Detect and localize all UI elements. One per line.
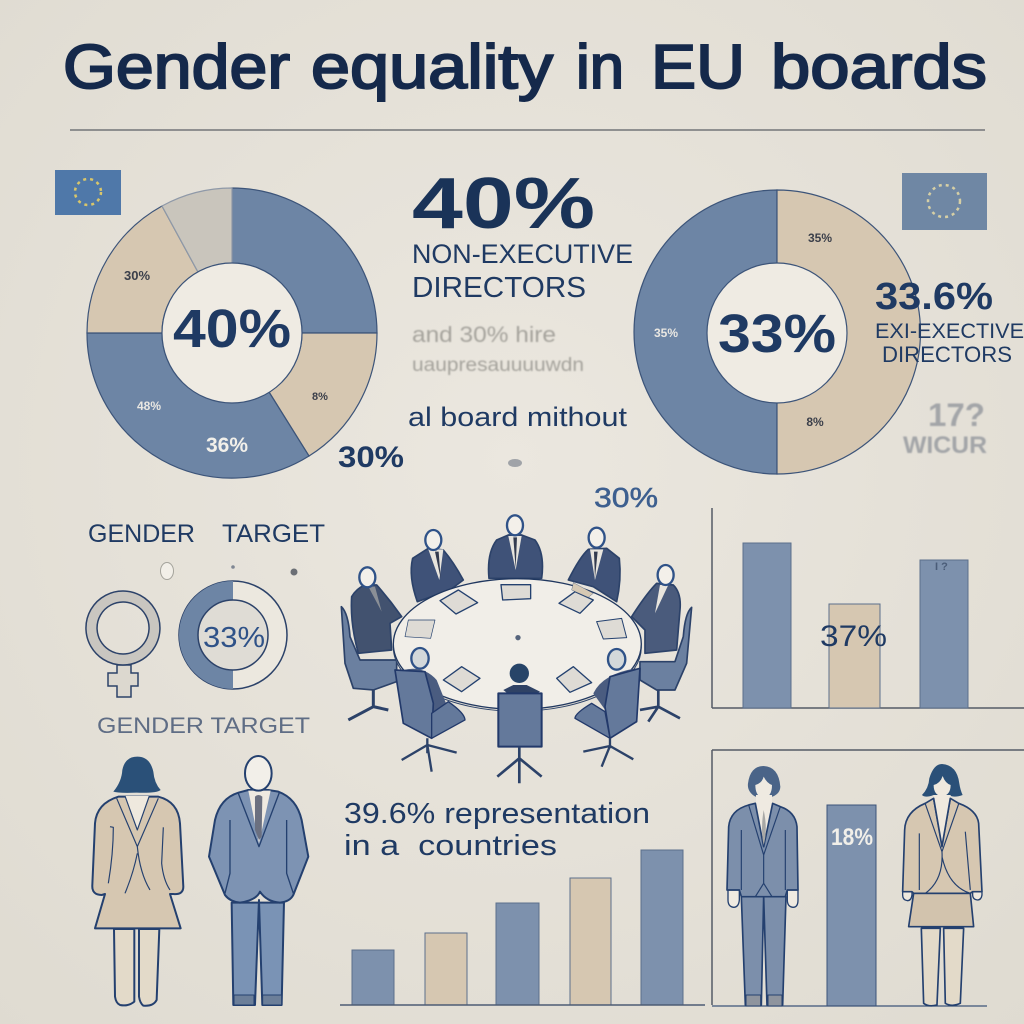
text: 39.6% representation: in a countries bbox=[344, 830, 557, 862]
donut segment labels: 35% bbox=[654, 326, 678, 340]
person and chair: front right bbox=[575, 649, 640, 767]
title: Gender bbox=[63, 33, 290, 102]
person and chair: front left bbox=[395, 648, 465, 772]
chart: right donut bbox=[634, 190, 920, 474]
face bbox=[755, 777, 772, 847]
chart: bottom right frame and bar bbox=[712, 750, 1024, 1006]
text: faded note bbox=[412, 322, 584, 376]
jacket bbox=[727, 803, 798, 897]
person: upper right bbox=[568, 528, 620, 602]
donut segment labels: 30% bbox=[124, 268, 150, 283]
icon: small dots bbox=[160, 562, 298, 580]
hands bbox=[728, 890, 798, 907]
text: 40% non-executive directors bbox=[412, 164, 633, 304]
person and chair: front centre bbox=[497, 664, 542, 783]
hair bbox=[748, 766, 780, 797]
person: upper left bbox=[411, 530, 463, 602]
illustration: boardroom meeting bbox=[341, 515, 692, 783]
chart: top right bars bbox=[712, 508, 1024, 708]
table bbox=[393, 579, 641, 711]
text: 33.6% executive directors bbox=[875, 276, 1024, 367]
person: top centre bbox=[489, 515, 542, 578]
title: equality bbox=[311, 33, 553, 102]
text: faded side note: WICUR bbox=[903, 432, 987, 459]
title: boards bbox=[771, 33, 987, 102]
donut centre value: 40% bbox=[173, 299, 291, 359]
text: 39.6% representation: 39.6% representation bbox=[344, 798, 650, 830]
bar value: 18% bbox=[831, 824, 873, 851]
icon: EU flag left bbox=[55, 170, 121, 215]
donut segment labels: 36% bbox=[206, 434, 248, 457]
title bbox=[63, 33, 987, 102]
trousers bbox=[232, 900, 284, 1005]
icon: female symbol bbox=[86, 591, 160, 697]
donut centre value: 33% bbox=[718, 304, 836, 364]
head bbox=[245, 756, 272, 791]
bar value small: I ? bbox=[935, 561, 948, 573]
donut segment labels: 8% bbox=[312, 391, 328, 403]
heading: gender target: GENDER bbox=[88, 520, 195, 548]
donut segment labels bbox=[124, 268, 328, 457]
donut segment labels: 35% bbox=[808, 231, 832, 245]
donut segment labels bbox=[654, 231, 832, 429]
text: 40% non-executive directors: DIRECTORS bbox=[412, 272, 586, 304]
text: faded side note: 17? bbox=[928, 397, 985, 433]
text: 30% above meeting: 30% bbox=[594, 482, 658, 513]
illustration: woman left bbox=[92, 757, 183, 1006]
text: faded note: and 30% hire bbox=[412, 322, 556, 347]
text: 40% non-executive directors: NON-EXECUTIVE bbox=[412, 239, 633, 269]
chart: bottom bars bbox=[340, 850, 705, 1005]
legs bbox=[114, 929, 159, 1006]
coat bbox=[92, 797, 183, 928]
text: 30% beside left donut: 30% bbox=[338, 441, 404, 474]
donut segment labels: 8% bbox=[806, 415, 824, 429]
hair bbox=[113, 757, 161, 793]
title: in bbox=[576, 33, 624, 102]
face and neck bbox=[934, 776, 951, 847]
heading: gender target: TARGET bbox=[222, 520, 325, 548]
text: faded side note bbox=[903, 397, 987, 459]
title: EU bbox=[651, 33, 745, 102]
icon: EU flag right bbox=[902, 173, 987, 230]
text: 40% non-executive directors: 40% bbox=[412, 164, 595, 244]
illustration: woman in grey suit bbox=[727, 766, 798, 1006]
illustration: man left bbox=[209, 756, 308, 1005]
icon: small dot bbox=[508, 459, 522, 467]
text: al board mithout: al board mithout bbox=[408, 402, 628, 432]
chair: right bbox=[640, 607, 692, 722]
bar value: 37% bbox=[820, 620, 887, 653]
person: far left bbox=[351, 567, 402, 653]
illustration: woman in tan suit bbox=[903, 764, 982, 1006]
jacket bbox=[903, 798, 982, 893]
hair bbox=[922, 764, 963, 797]
text: 39.6% representation bbox=[344, 798, 650, 862]
heading: gender target lower: GENDER TARGET bbox=[97, 713, 310, 738]
trousers bbox=[741, 897, 786, 1005]
heading: gender target bbox=[88, 520, 325, 548]
legs bbox=[921, 928, 964, 1006]
chart: small donut bbox=[179, 581, 287, 689]
chart: left donut bbox=[87, 188, 377, 478]
text: 33.6% executive directors: 33.6% bbox=[875, 276, 993, 318]
text: 33.6% executive directors: EXI-EXECTIVE bbox=[875, 320, 1024, 343]
chair: left bbox=[341, 607, 397, 720]
person: far right bbox=[632, 565, 680, 653]
documents on table bbox=[405, 583, 627, 692]
donut segment labels: 48% bbox=[137, 399, 161, 413]
hands bbox=[903, 892, 982, 901]
text: 33.6% executive directors: DIRECTORS bbox=[882, 342, 1012, 367]
small donut value: 33% bbox=[203, 622, 265, 654]
skirt bbox=[909, 893, 974, 927]
text: faded note: uaupresauuuuwdn bbox=[412, 355, 584, 376]
jacket bbox=[209, 790, 308, 903]
